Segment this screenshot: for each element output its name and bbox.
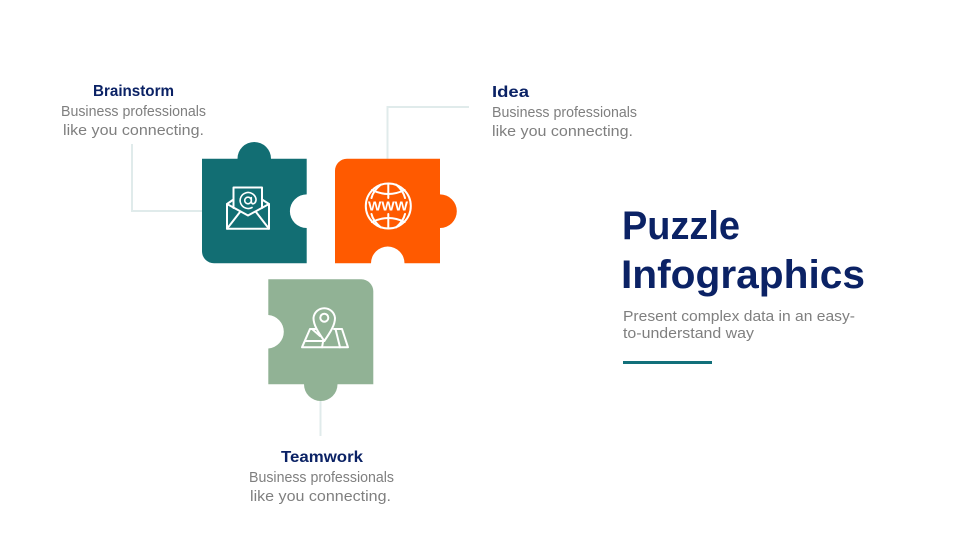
puzzle piece: brainstorm (teal) <box>202 142 307 263</box>
connector: brainstorm <box>132 144 202 211</box>
label: teamwork <box>249 449 394 505</box>
icon: map pin on map <box>302 308 348 347</box>
text: idea description: Business professionals <box>492 105 637 121</box>
heading: teamwork: Teamwork <box>281 449 363 466</box>
connector: teamwork <box>320 400 322 436</box>
icon: open envelope with at sign <box>227 188 269 229</box>
connector: idea <box>388 107 469 159</box>
text: idea description: like you connecting. <box>492 123 633 140</box>
label: idea <box>492 84 637 140</box>
title: Infographics <box>621 253 865 297</box>
icon: www globe: WWW <box>368 200 408 214</box>
title <box>621 204 865 297</box>
heading: idea: Idea <box>492 84 529 101</box>
heading: brainstorm: Brainstorm <box>93 83 174 100</box>
text: teamwork description: like you connecting. <box>250 488 391 505</box>
text: brainstorm description: like you connecting. <box>63 122 204 139</box>
title: Puzzle <box>622 204 740 248</box>
text: brainstorm description: Business professionals <box>61 104 206 120</box>
puzzle piece: teamwork (green) <box>268 279 373 401</box>
subtitle <box>623 308 855 342</box>
text: idea description <box>492 105 637 140</box>
label: brainstorm <box>61 83 206 139</box>
puzzle piece: idea (orange) <box>335 159 457 263</box>
text: brainstorm description <box>61 104 206 139</box>
subtitle: Present complex data in an easy- <box>623 308 855 325</box>
text: teamwork description <box>249 470 394 505</box>
accent rule <box>623 361 712 364</box>
subtitle: to-understand way <box>623 325 755 342</box>
text: teamwork description: Business professionals <box>249 470 394 486</box>
